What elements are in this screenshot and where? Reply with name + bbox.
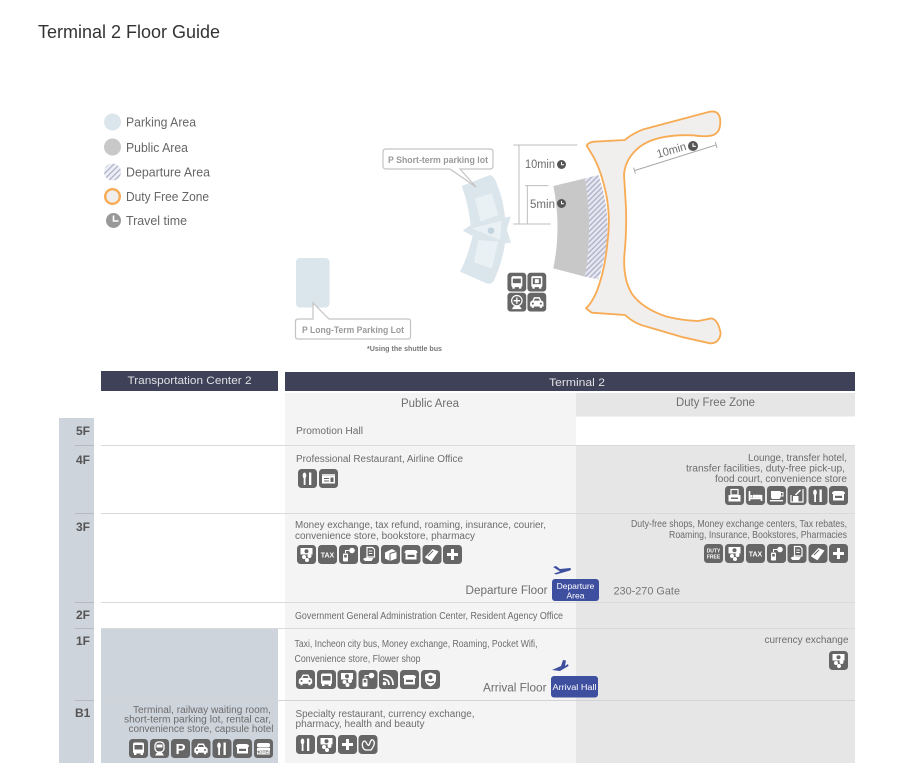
icon: food court xyxy=(808,486,828,505)
panel: public area column xyxy=(285,393,576,763)
floor labels: 1F xyxy=(76,634,90,648)
1F public icons xyxy=(296,670,440,689)
badge: departure area xyxy=(552,579,599,601)
icon: railway xyxy=(150,739,169,758)
floor labels: B1 xyxy=(75,706,91,720)
4F public icons xyxy=(298,469,338,488)
icon: money exchange xyxy=(297,545,316,564)
icon: bus terminal xyxy=(129,739,148,758)
3F public text: convenience store, bookstore, pharmacy xyxy=(295,531,475,542)
B1 transportation text xyxy=(124,705,274,735)
icon: flower shop xyxy=(421,670,440,689)
transport icons xyxy=(507,273,546,312)
panel: transportation center lower floors xyxy=(101,628,278,763)
icon: hotel xyxy=(746,486,765,505)
icon: taxi xyxy=(296,670,315,689)
B1 public text: Specialty restaurant, currency exchange, xyxy=(296,709,474,720)
3F duty free text: Roaming, Insurance, Bookstores, Pharmacies xyxy=(669,530,847,541)
icon: money exchange xyxy=(725,544,744,563)
icon: insurance xyxy=(360,545,379,564)
icon: parking xyxy=(171,739,190,758)
3F duty free text xyxy=(631,519,847,541)
icon: roaming xyxy=(767,544,786,563)
icon: insurance xyxy=(788,544,806,563)
note: shuttle bus: *Using the shuttle bus xyxy=(367,344,442,353)
2F public text: Government General Administration Center, Resident Agency Office xyxy=(295,611,563,622)
long-term parking area xyxy=(296,258,330,308)
legend: parking area: Parking Area xyxy=(126,116,196,130)
icon: cafe xyxy=(767,486,786,505)
icon: transfer xyxy=(788,486,806,505)
4F public text: Professional Restaurant, Airline Office xyxy=(296,454,463,465)
short-term parking area xyxy=(460,175,511,284)
B1 public text: pharmacy, health and beauty xyxy=(296,719,424,730)
4F duty free icons xyxy=(725,486,848,505)
icon: duty free xyxy=(704,544,723,563)
floor labels: 4F xyxy=(76,453,90,467)
icon: convenience store xyxy=(829,486,848,505)
floor labels xyxy=(75,424,91,720)
panel: duty free zone column xyxy=(576,445,855,763)
badge: arrival hall xyxy=(551,676,598,698)
heading: terminal 2 xyxy=(285,372,855,391)
icon: bus xyxy=(507,273,526,292)
icon: pocket wifi xyxy=(379,670,398,689)
callout: short-term parking lot: P Short-term parking lot xyxy=(388,155,488,165)
4F duty free text xyxy=(686,453,847,485)
legend: travel time: Travel time xyxy=(126,214,187,228)
label: 10min: 10min xyxy=(525,159,555,171)
icon: restaurant xyxy=(212,739,232,758)
icon: convenience store xyxy=(402,545,420,564)
floor labels: 2F xyxy=(76,608,90,622)
icon: restaurant xyxy=(296,735,315,754)
badge: departure area: Departure xyxy=(557,581,595,591)
B1 transportation text: short-term parking lot, rental car, xyxy=(124,714,271,726)
1F public text xyxy=(294,639,538,665)
B1 transportation icons xyxy=(129,739,273,758)
icon: lounge xyxy=(725,486,744,505)
floor labels: 5F xyxy=(76,424,90,438)
public area block xyxy=(553,178,589,277)
icon: roaming xyxy=(339,545,358,564)
icon: pharmacy xyxy=(338,735,357,754)
legend: public area: Public Area xyxy=(126,141,188,155)
icon: restaurant xyxy=(298,469,317,488)
icon: money exchange xyxy=(338,670,356,689)
terminal map xyxy=(460,111,721,343)
title: Terminal 2 Floor Guide xyxy=(38,22,220,42)
legend: duty free zone: Duty Free Zone xyxy=(126,190,209,204)
5F public text: Promotion Hall xyxy=(296,426,363,437)
label: departure floor: Departure Floor xyxy=(466,585,548,597)
icon: airline office xyxy=(319,469,338,488)
icon: bus xyxy=(317,670,336,689)
icon: health and beauty xyxy=(358,735,378,754)
icon: bookstore xyxy=(422,545,442,564)
icon: tax refund: TAX xyxy=(749,552,763,558)
duty free zone building xyxy=(586,111,721,343)
label: gates: 230-270 Gate xyxy=(614,586,680,598)
label: 5min: 5min xyxy=(530,199,555,211)
icon: tax refund: TAX xyxy=(321,552,335,560)
icon: duty free: DUTY xyxy=(707,548,721,554)
legend: departure area: Departure Area xyxy=(126,166,210,180)
icon: tax refund xyxy=(746,544,765,563)
departure area hatching xyxy=(585,175,607,279)
floor labels: 3F xyxy=(76,520,90,534)
floor column xyxy=(59,418,94,763)
departure plane icon xyxy=(553,566,571,574)
icon: courier xyxy=(381,545,400,564)
heading: public area: Public Area xyxy=(401,398,460,410)
icon: rental car xyxy=(192,739,210,758)
icon: taxi xyxy=(527,293,546,312)
B1 transportation text: Terminal, railway waiting room, xyxy=(133,705,271,716)
heading: transportation center 2: Transportation Center 2 xyxy=(128,375,252,387)
label: arrival floor: Arrival Floor xyxy=(483,682,547,694)
icon: shuttle xyxy=(527,273,546,292)
callout: long-term parking lot: P Long-Term Parking Lot xyxy=(302,325,404,335)
icon: pharmacy xyxy=(443,545,462,564)
callout: short-term parking lot xyxy=(383,149,493,187)
3F public text: Money exchange, tax refund, roaming, insurance, courier, xyxy=(295,520,546,531)
travel time dimension lines xyxy=(513,142,717,224)
arrival plane icon xyxy=(552,660,568,671)
heading: duty free zone: Duty Free Zone xyxy=(676,397,755,409)
heading: terminal 2: Terminal 2 xyxy=(549,377,605,389)
1F public text: Taxi, Incheon city bus, Money exchange, Roaming, Pocket Wifi, xyxy=(294,639,538,650)
icon: capsule hotel xyxy=(254,739,273,758)
label: 10min concourse: 10min xyxy=(656,141,688,161)
B1 public text xyxy=(296,709,474,730)
4F duty free text: transfer facilities, duty-free pick-up, xyxy=(686,464,845,474)
3F duty free text: Duty-free shops, Money exchange centers, Tax rebates, xyxy=(631,519,847,530)
icon: convenience store xyxy=(400,670,419,689)
icon: duty free: FREE xyxy=(707,554,721,560)
3F public text xyxy=(295,520,546,542)
icon: parking: P xyxy=(175,741,186,758)
legend xyxy=(104,114,210,228)
1F public text: Convenience store, Flower shop xyxy=(294,654,421,665)
3F duty free icons xyxy=(704,544,848,563)
callout: long-term parking lot xyxy=(296,303,410,339)
icon: train xyxy=(507,293,526,312)
3F public icons xyxy=(297,545,462,564)
icon: tax refund xyxy=(318,545,337,564)
panel: duty free zone header background xyxy=(576,393,855,416)
badge: departure area: Area xyxy=(567,590,585,600)
1F duty free text: currency exchange xyxy=(764,635,849,646)
B1 transportation text: convenience store, capsule hotel xyxy=(128,724,274,735)
4F duty free text: Lounge, transfer hotel, xyxy=(748,453,847,464)
4F duty free text: food court, convenience store xyxy=(715,474,847,485)
icon: bookstore xyxy=(808,544,828,563)
badge: arrival hall: Arrival Hall xyxy=(552,682,597,692)
icon: roaming xyxy=(358,670,378,689)
label: 5min xyxy=(530,199,566,211)
icon: money exchange xyxy=(829,651,848,670)
B1 public icons xyxy=(296,735,378,754)
icon: pharmacy xyxy=(829,544,848,563)
heading: transportation center 2 xyxy=(101,371,278,391)
icon: capsule hotel: HOTEL xyxy=(256,749,271,754)
icon: convenience store xyxy=(233,739,252,758)
icon: currency exchange xyxy=(317,735,336,754)
